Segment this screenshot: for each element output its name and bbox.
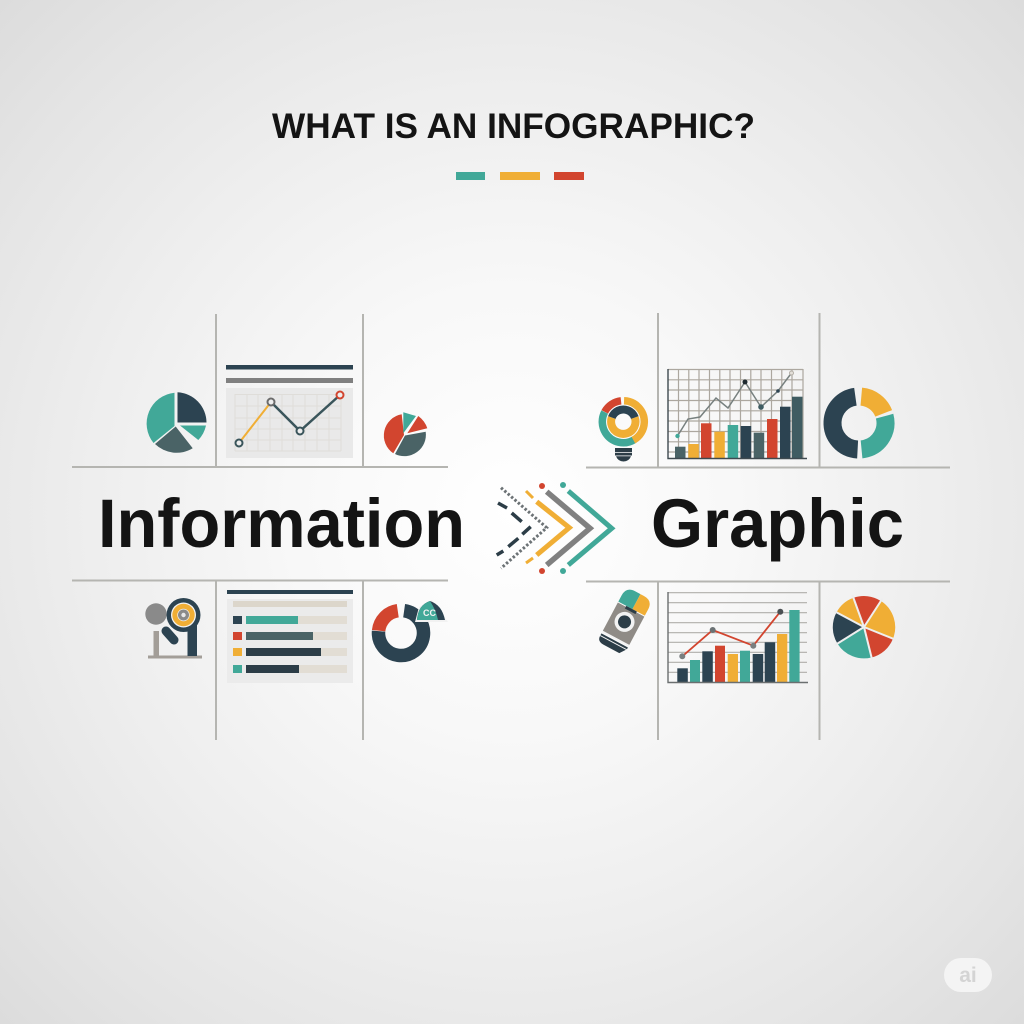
icon: small pie top bbox=[384, 412, 427, 456]
arrow: chevrons bbox=[497, 482, 612, 574]
heading: Graphic: Graphic bbox=[651, 485, 904, 562]
icon: donut top right bbox=[827, 391, 891, 455]
line chart panel top left bbox=[226, 365, 353, 458]
icon: pie bottom right bbox=[834, 595, 896, 660]
combo chart top right bbox=[668, 369, 807, 458]
title: WHAT IS AN INFOGRAPHIC? bbox=[272, 106, 755, 146]
bar list panel bbox=[227, 590, 353, 683]
watermark badge: ai bbox=[959, 964, 977, 987]
icon: gear and stand bbox=[145, 598, 202, 658]
icon: pie chart top left bbox=[147, 392, 206, 453]
watermark badge bbox=[944, 958, 992, 992]
bar and line chart bottom right bbox=[668, 592, 808, 682]
heading: Information: Information bbox=[98, 485, 465, 562]
icon: pen capsule bbox=[597, 587, 653, 655]
icon: donut with badge: CC bbox=[423, 608, 436, 618]
icon: donut with badge bbox=[376, 600, 448, 658]
icon: lightbulb rings bbox=[594, 393, 652, 462]
title accent bars bbox=[456, 172, 584, 180]
